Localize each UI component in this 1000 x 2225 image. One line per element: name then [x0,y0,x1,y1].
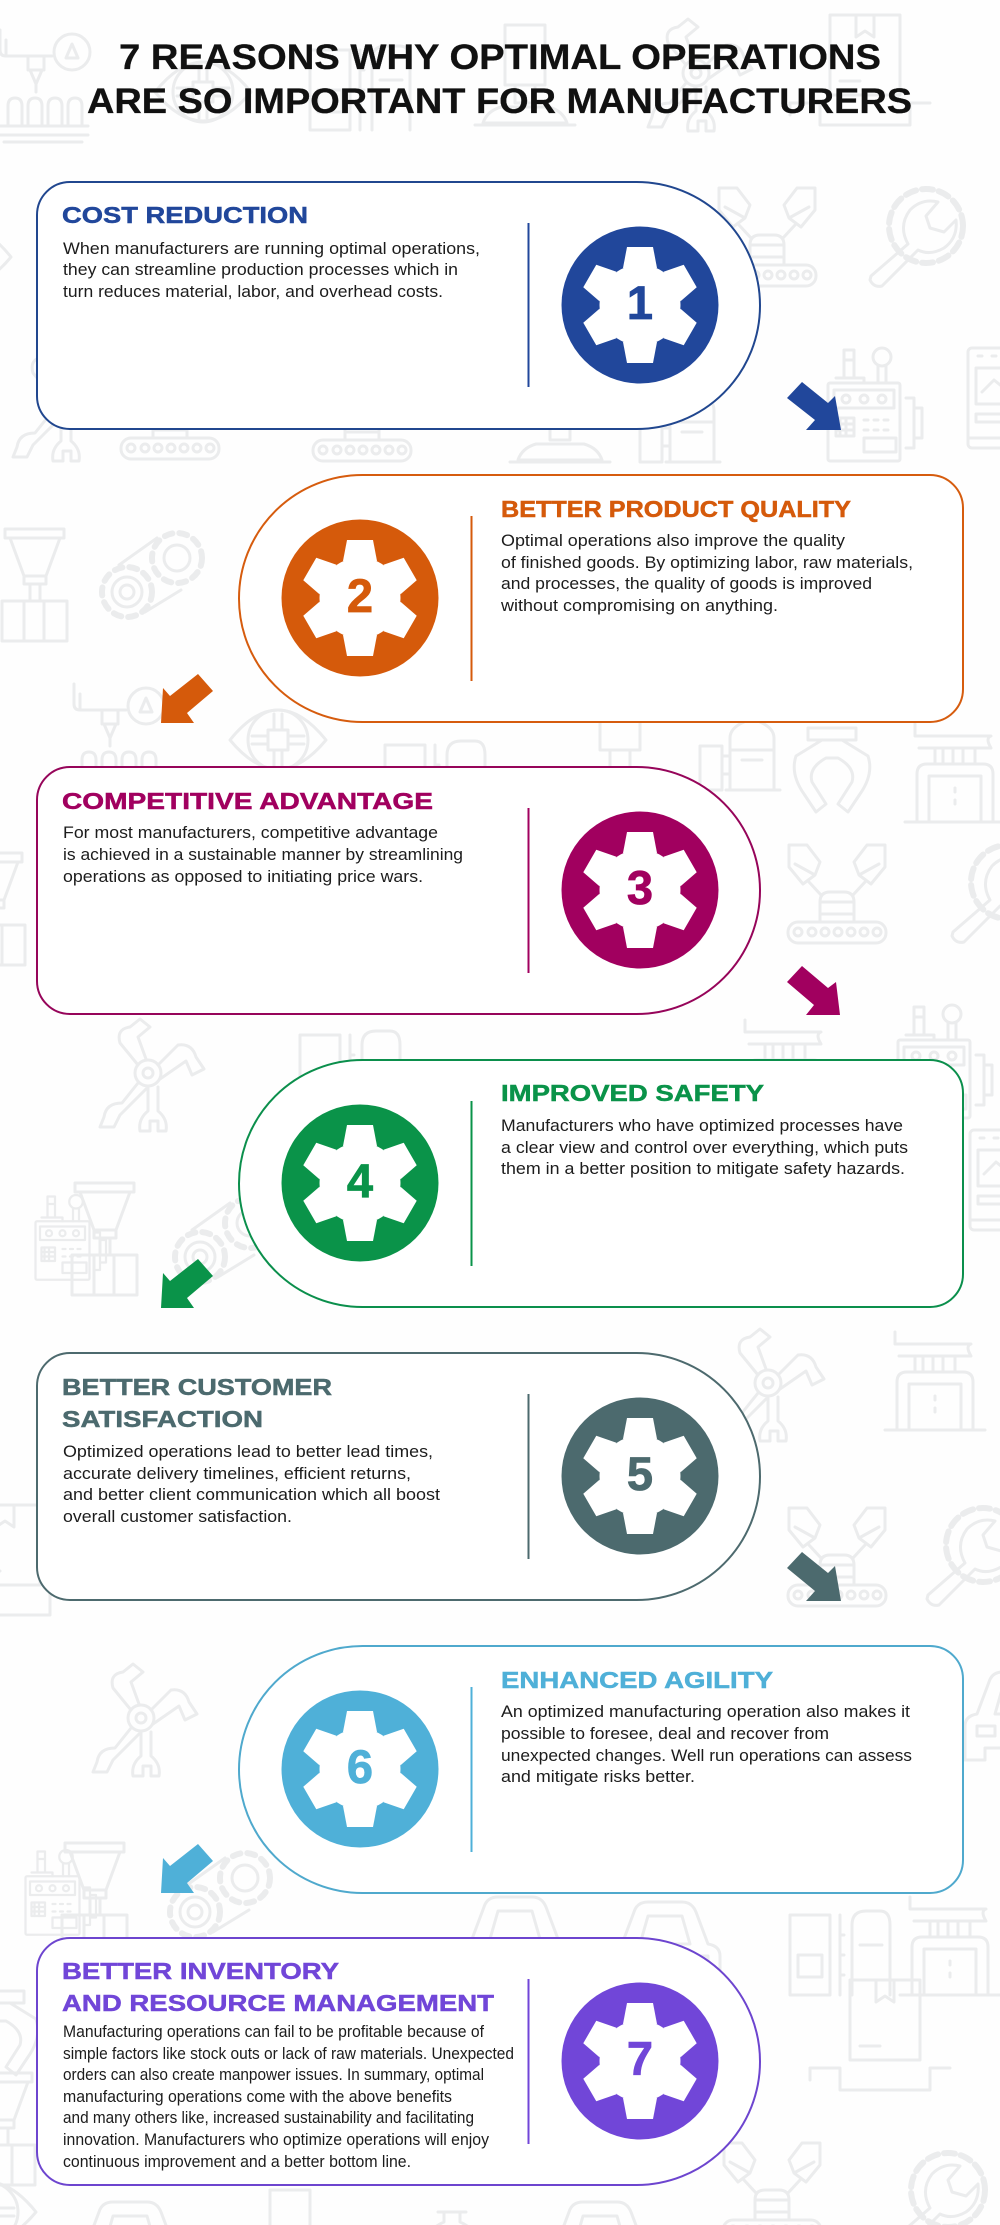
icon: gear number 4 [282,1104,438,1262]
icon: gear number 1 [562,226,718,384]
heading [62,1958,495,2016]
title: ARE SO IMPORTANT FOR MANUFACTURERS [87,82,912,121]
icon: gear number 5 [562,1398,718,1554]
body text: Manufacturing operations can fail to be profitable because of [63,2023,484,2041]
heading: BETTER CUSTOMER [62,1374,332,1400]
body text [501,1117,908,1178]
body text: accurate delivery timelines, efficient returns, [63,1465,411,1483]
body text [500,532,913,615]
body text: of finished goods. By optimizing labor, raw materials, [501,554,913,572]
body text: possible to foresee, deal and recover from [501,1725,829,1743]
body text: An optimized manufacturing operation also makes it [501,1703,910,1721]
card outline [239,1646,963,1893]
body text: them in a better position to mitigate safety hazards. [501,1160,905,1178]
card outline [37,767,760,1014]
body text: overall customer satisfaction. [63,1508,292,1526]
icon: gear number 2 [282,520,438,676]
heading: ENHANCED AGILITY [501,1667,773,1693]
body text [501,1703,912,1786]
icon: gear number 3: 3 [627,861,653,914]
arrow: to card 3 [161,674,213,723]
body text: manufacturing operations come with the above benefits [63,2088,452,2106]
arrow: to card 2 [787,382,841,430]
heading: IMPROVED SAFETY [501,1080,764,1106]
arrow: to card 5 [161,1259,213,1308]
body text: simple factors like stock outs or lack of raw materials. Unexpected [63,2045,514,2063]
body text [63,240,480,301]
body text: they can streamline production processes which in [63,261,458,279]
heading: COST REDUCTION [62,202,308,228]
body text: Manufacturers who have optimized processes have [501,1117,903,1135]
heading: COMPETITIVE ADVANTAGE [62,788,433,814]
body text [63,824,463,886]
heading: AND RESOURCE MANAGEMENT [62,1990,495,2016]
icon: gear number 7 [562,1982,718,2140]
body text: For most manufacturers, competitive advantage [63,824,438,842]
panel: improved safety [239,1060,963,1307]
panel: better product quality [239,475,963,722]
body text: Optimal operations also improve the quality [501,532,846,550]
body text: operations as opposed to initiating price wars. [63,868,423,886]
card outline [37,1938,760,2185]
body text: without compromising on anything. [500,597,778,615]
body text: a clear view and control over everything, which puts [501,1139,908,1157]
body text: unexpected changes. Well run operations can assess [501,1747,912,1765]
icon: gear number 5: 5 [627,1447,653,1500]
body text: When manufacturers are running optimal operations, [63,240,480,258]
panel: better customer satisfaction [37,1353,760,1600]
panel: competitive advantage [37,767,760,1014]
card outline [239,1060,963,1307]
icon: gear number 4: 4 [347,1154,373,1207]
heading: BETTER PRODUCT QUALITY [501,496,851,522]
body text: Optimized operations lead to better lead times, [63,1443,433,1461]
arrow: to card 4 [787,966,840,1015]
heading [62,1374,332,1432]
body text: and mitigate risks better. [501,1768,695,1786]
arrow: to card 6 [787,1552,841,1601]
body text [63,1443,440,1526]
body text: innovation. Manufacturers who optimize operations will enjoy [63,2131,490,2149]
panel: cost reduction [37,182,760,429]
icon: gear number 1: 1 [627,276,653,329]
heading: SATISFACTION [62,1406,263,1432]
body text: and many others like, increased sustainability and facilitating [63,2109,474,2127]
body text: is achieved in a sustainable manner by streamlining [63,846,463,864]
arrow: to card 7 [161,1844,213,1893]
title: 7 REASONS WHY OPTIMAL OPERATIONS [119,38,881,77]
body text: orders can also create manpower issues. In summary, optimal [63,2066,484,2084]
icon: gear number 3 [562,812,718,968]
card outline [239,475,963,722]
body text: turn reduces material, labor, and overhead costs. [63,283,443,301]
icon: gear number 7: 7 [627,2032,653,2085]
heading: BETTER INVENTORY [62,1958,339,1984]
icon: gear number 6: 6 [347,1740,373,1793]
card outline [37,1353,760,1600]
panel: better inventory and resource management [37,1938,760,2185]
body text: continuous improvement and a better bottom line. [63,2153,411,2171]
body text [63,2023,514,2171]
icon: gear number 2: 2 [347,569,373,622]
icon: gear number 6 [282,1690,438,1848]
card outline [37,182,760,429]
body text: and better client communication which all boost [63,1486,440,1504]
body text: and processes, the quality of goods is improved [501,575,872,593]
title [87,38,912,121]
panel: enhanced agility [239,1646,963,1893]
